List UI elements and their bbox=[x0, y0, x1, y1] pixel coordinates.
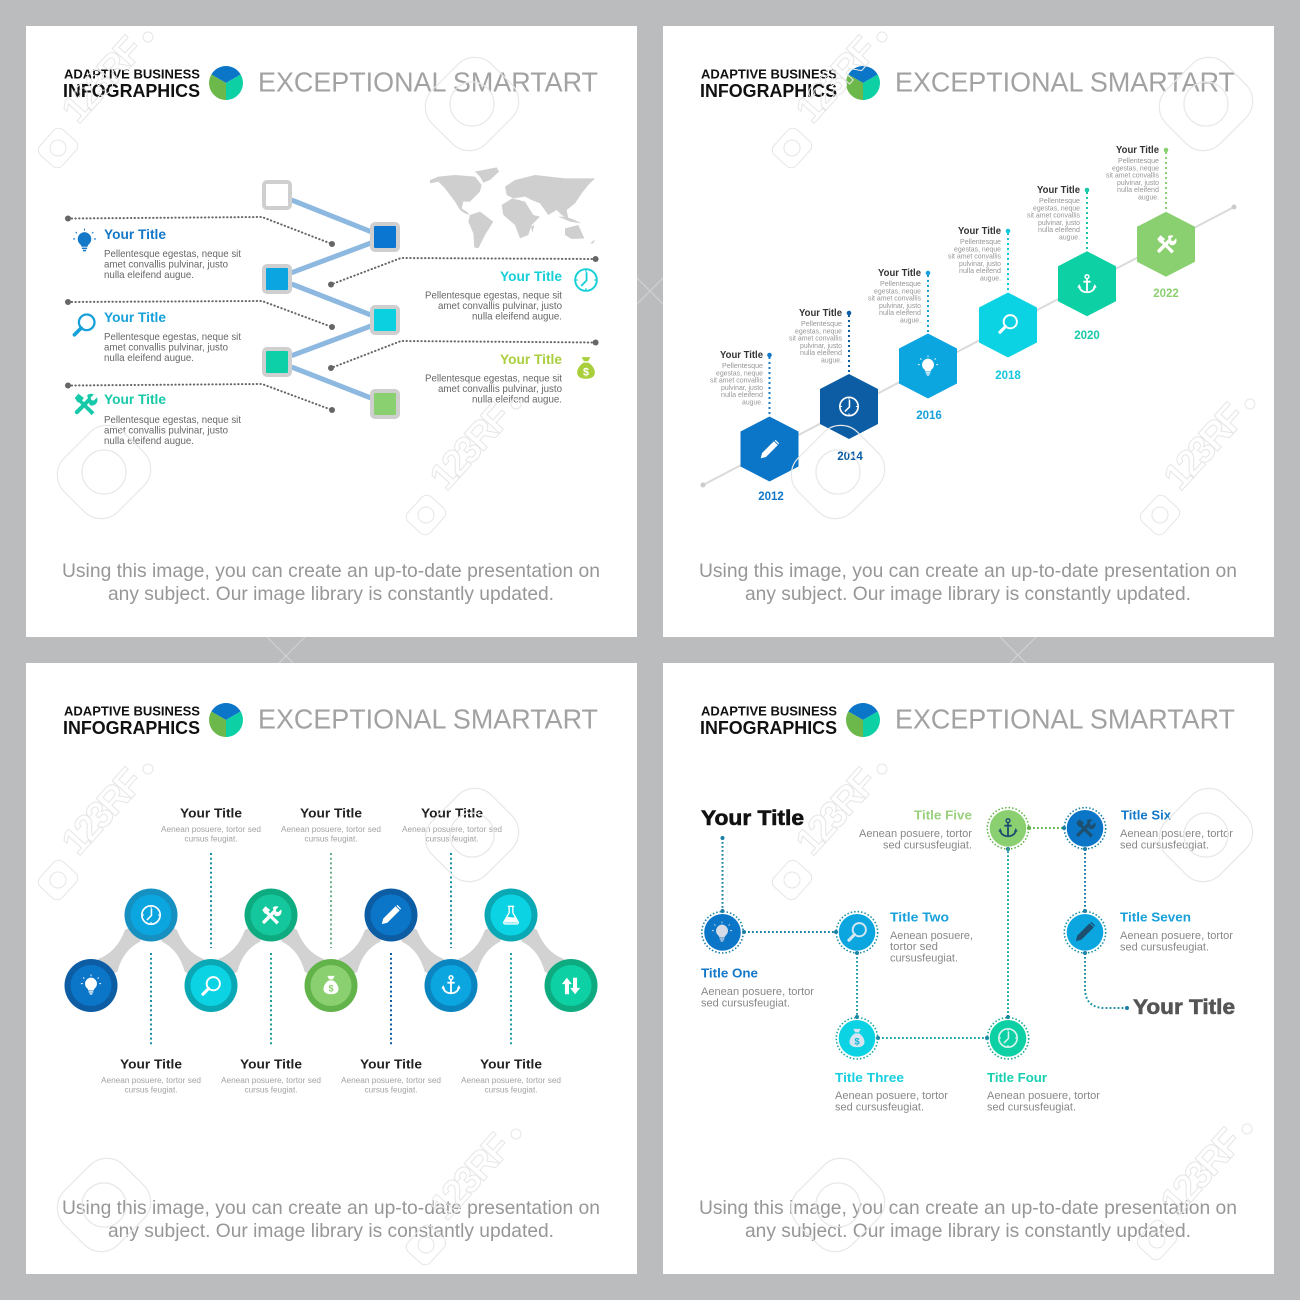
text block: title six: Title Six bbox=[1121, 808, 1172, 822]
step 2012 bbox=[710, 350, 798, 503]
text block: right 1: Pellentesque egestas, neque sit bbox=[425, 290, 562, 302]
text block: title seven: sed cursusfeugiat. bbox=[1120, 942, 1209, 954]
step 2018: pulvinar, justo bbox=[959, 259, 1001, 268]
watermark overlay: 123RF bbox=[422, 1126, 520, 1228]
caption top 2: cursus feugiat. bbox=[304, 834, 358, 844]
caption bottom 1 bbox=[101, 1056, 201, 1094]
caption top 3 bbox=[402, 806, 502, 844]
end title: Your Title bbox=[1133, 996, 1235, 1019]
header: INFOGRAPHICS bbox=[700, 717, 837, 738]
footer text: Using this image, you can create an up-to-date presentation on bbox=[699, 1197, 1237, 1219]
caption bottom 3 bbox=[341, 1056, 441, 1094]
step 2022: Your Title bbox=[1116, 145, 1159, 156]
text block: left 3: amet convallis pulvinar, justo bbox=[104, 426, 228, 436]
step 2014: sit amet convallis bbox=[789, 334, 842, 343]
step 2014 bbox=[789, 308, 878, 463]
text block: right 1 bbox=[425, 268, 562, 322]
text block: title four: Aenean posuere, tortor bbox=[987, 1090, 1100, 1102]
text block: title one: Aenean posuere, tortor bbox=[701, 986, 814, 998]
caption bottom 4: Aenean posuere, tortor sed bbox=[461, 1076, 561, 1085]
text block: title three: Aenean posuere, tortor bbox=[835, 1090, 948, 1102]
caption top 3: Aenean posuere, tortor sed bbox=[402, 825, 502, 834]
icon: bulb bbox=[73, 229, 96, 251]
node 7: pencil bbox=[1064, 912, 1106, 953]
footer text: Using this image, you can create an up-to-date presentation on bbox=[699, 560, 1237, 582]
text block: title two: Title Two bbox=[890, 910, 949, 924]
step 2016: Your Title bbox=[878, 268, 921, 279]
text block: title four bbox=[987, 1070, 1100, 1114]
header bbox=[700, 703, 1235, 738]
footer text bbox=[62, 560, 600, 605]
header: INFOGRAPHICS bbox=[63, 717, 200, 738]
node: arrows bbox=[544, 959, 598, 1012]
step 2020: egestas, neque bbox=[1033, 203, 1080, 212]
watermark overlay: 123RF bbox=[788, 761, 886, 863]
path end dots bbox=[720, 826, 1129, 1040]
step 2022 bbox=[1106, 145, 1195, 300]
caption bottom 3: cursus feugiat. bbox=[364, 1086, 418, 1094]
step 2014: Pellentesque bbox=[801, 319, 842, 328]
text block: right 1: nulla eleifend augue. bbox=[472, 312, 562, 322]
step 2022: nulla eleifend bbox=[1117, 185, 1159, 194]
step 2012: pulvinar, justo bbox=[721, 383, 763, 392]
caption top 2: Your Title bbox=[300, 806, 362, 820]
header: EXCEPTIONAL SMARTART bbox=[895, 66, 1235, 98]
text block: title one: sed cursusfeugiat. bbox=[701, 998, 790, 1010]
panel: process path bbox=[663, 663, 1274, 1274]
text block: title five: Title Five bbox=[914, 808, 972, 822]
step 2016: pulvinar, justo bbox=[879, 301, 921, 310]
dotted path bbox=[722, 828, 1127, 1038]
dotted lines bbox=[151, 853, 511, 1047]
footer text: any subject. Our image library is constantly updated. bbox=[745, 1220, 1191, 1242]
caption bottom 2 bbox=[221, 1056, 321, 1094]
text block: title five bbox=[859, 808, 972, 852]
step 2018: Your Title bbox=[958, 226, 1001, 237]
step 2016: Pellentesque bbox=[880, 279, 921, 288]
header: INFOGRAPHICS bbox=[63, 80, 200, 101]
start title: Your Title bbox=[701, 807, 804, 830]
step 2012: egestas, neque bbox=[716, 368, 763, 377]
step 2014: pulvinar, justo bbox=[800, 341, 842, 350]
header: EXCEPTIONAL SMARTART bbox=[258, 704, 598, 734]
step 2020: pulvinar, justo bbox=[1038, 218, 1080, 227]
caption bottom 4: cursus feugiat. bbox=[484, 1086, 538, 1094]
step 2012: nulla eleifend bbox=[721, 390, 763, 399]
step 2016: sit amet convallis bbox=[868, 294, 921, 303]
step 2016: augue. bbox=[900, 316, 921, 324]
step 2020 bbox=[1027, 185, 1116, 342]
node 3: money bag bbox=[836, 1018, 878, 1059]
node: money bag bbox=[304, 959, 358, 1012]
step 2012: Pellentesque bbox=[722, 361, 763, 370]
icon: money bag bbox=[577, 357, 595, 379]
node: pencil bbox=[364, 888, 418, 942]
text block: title four: sed cursusfeugiat. bbox=[987, 1102, 1076, 1114]
step 2022: augue. bbox=[1138, 192, 1159, 202]
header: ADAPTIVE BUSINESS bbox=[64, 704, 200, 718]
text block: title two bbox=[890, 910, 973, 964]
caption top 1: cursus feugiat. bbox=[184, 834, 238, 844]
text block: title five: Aenean posuere, tortor bbox=[859, 828, 972, 840]
squares bbox=[264, 182, 398, 417]
node: flask bbox=[484, 888, 538, 942]
connector lines bbox=[292, 200, 371, 398]
text block: title two: cursusfeugiat. bbox=[890, 952, 958, 964]
caption top 2: Aenean posuere, tortor sed bbox=[281, 825, 381, 834]
text block: left 1: amet convallis pulvinar, justo bbox=[104, 260, 228, 270]
text block: title two: tortor sed bbox=[890, 941, 938, 953]
text block: title one: Title One bbox=[701, 966, 758, 980]
footer text bbox=[62, 1197, 600, 1242]
step 2016: nulla eleifend bbox=[879, 308, 921, 317]
node: magnifier bbox=[184, 959, 238, 1012]
text block: right 1: amet convallis pulvinar, justo bbox=[438, 301, 562, 312]
step 2022: egestas, neque bbox=[1112, 163, 1159, 172]
text block: title four: Title Four bbox=[987, 1070, 1047, 1085]
node 6: tools bbox=[1064, 808, 1106, 849]
step 2014: nulla eleifend bbox=[800, 348, 842, 357]
footer text bbox=[699, 560, 1237, 605]
caption top 1: Aenean posuere, tortor sed bbox=[161, 825, 261, 834]
caption bottom 4: Your Title bbox=[480, 1056, 542, 1072]
step 2016: 2016 bbox=[916, 410, 942, 422]
step 2014: augue. bbox=[821, 356, 842, 364]
step 2014: egestas, neque bbox=[795, 326, 842, 335]
text block: left 2: Pellentesque egestas, neque sit bbox=[104, 332, 241, 343]
node: clock bbox=[124, 888, 178, 942]
text block: title three: Title Three bbox=[835, 1070, 904, 1085]
watermark overlay: 123RF bbox=[54, 761, 152, 863]
step 2018 bbox=[948, 226, 1037, 382]
caption bottom 4 bbox=[461, 1056, 561, 1094]
step 2012: 2012 bbox=[758, 491, 784, 503]
text block: title five: sed cursusfeugiat. bbox=[883, 840, 972, 852]
step 2018: Pellentesque bbox=[960, 237, 1001, 246]
node 5: anchor bbox=[987, 808, 1029, 849]
panel: hexagon timeline bbox=[663, 26, 1274, 637]
step 2012: Your Title bbox=[720, 350, 763, 361]
text block: title two: Aenean posuere, bbox=[890, 930, 973, 942]
footer text: Using this image, you can create an up-to-date presentation on bbox=[62, 560, 600, 582]
step 2012: sit amet convallis bbox=[710, 376, 763, 385]
text block: left 2: nulla eleifend augue. bbox=[104, 353, 194, 364]
caption bottom 2: Aenean posuere, tortor sed bbox=[221, 1076, 321, 1085]
step 2022: sit amet convallis bbox=[1106, 171, 1159, 180]
caption bottom 1: cursus feugiat. bbox=[124, 1086, 178, 1094]
caption top 2 bbox=[281, 806, 381, 844]
node: tools bbox=[244, 888, 298, 942]
dotted leader lines bbox=[68, 217, 596, 410]
node 2: magnifier bbox=[836, 912, 878, 953]
step 2020: Pellentesque bbox=[1039, 196, 1080, 205]
caption top 1: Your Title bbox=[180, 806, 242, 820]
step 2020: sit amet convallis bbox=[1027, 211, 1080, 220]
caption top 3: Your Title bbox=[421, 806, 483, 820]
text block: title six: Aenean posuere, tortor bbox=[1120, 828, 1233, 840]
step 2018: augue. bbox=[980, 274, 1001, 282]
caption top 3: cursus feugiat. bbox=[426, 834, 478, 844]
step 2018: sit amet convallis bbox=[948, 252, 1001, 261]
header: EXCEPTIONAL SMARTART bbox=[258, 66, 598, 98]
text block: title one bbox=[701, 966, 814, 1010]
icon: clock bbox=[575, 269, 597, 291]
watermark overlay: 123RF bbox=[422, 396, 520, 498]
text block: title three: sed cursusfeugiat. bbox=[835, 1102, 924, 1114]
caption bottom 3: Aenean posuere, tortor sed bbox=[341, 1076, 441, 1085]
text block: right 2: nulla eleifend augue. bbox=[472, 394, 562, 406]
text block: left 3: Your Title bbox=[104, 391, 166, 407]
step 2016 bbox=[868, 268, 957, 422]
node: anchor bbox=[424, 959, 478, 1012]
text block: left 2 bbox=[104, 309, 241, 364]
header bbox=[63, 66, 598, 101]
diagonal axis bbox=[700, 204, 1236, 488]
step 2018: nulla eleifend bbox=[959, 266, 1001, 275]
footer text: any subject. Our image library is constantly updated. bbox=[108, 583, 554, 605]
watermark overlay: 123RF bbox=[788, 29, 886, 131]
caption bottom 2: Your Title bbox=[240, 1056, 302, 1072]
leader dots bbox=[65, 216, 599, 413]
text block: right 1: Your Title bbox=[500, 268, 562, 284]
text block: title six bbox=[1120, 808, 1233, 852]
text block: left 3: nulla eleifend augue. bbox=[104, 436, 194, 447]
step 2020: nulla eleifend bbox=[1038, 225, 1080, 234]
watermark overlay: 123RF bbox=[1153, 1121, 1251, 1223]
caption top 1 bbox=[161, 806, 261, 844]
caption bottom 1: Aenean posuere, tortor sed bbox=[101, 1076, 201, 1085]
text block: right 2: Pellentesque egestas, neque sit bbox=[425, 374, 562, 384]
footer text bbox=[699, 1197, 1237, 1242]
step 2014: 2014 bbox=[837, 451, 863, 463]
text block: right 2 bbox=[425, 351, 562, 406]
text block: title seven: Title Seven bbox=[1120, 910, 1191, 924]
header bbox=[700, 66, 1235, 101]
step 2020: 2020 bbox=[1074, 330, 1100, 342]
text block: left 1: Pellentesque egestas, neque sit bbox=[104, 249, 241, 260]
icon: magnifier bbox=[74, 314, 95, 335]
wave connector bbox=[91, 915, 571, 985]
text block: left 3: Pellentesque egestas, neque sit bbox=[104, 415, 241, 426]
step 2018: 2018 bbox=[995, 370, 1021, 382]
panel: network diagram with world map bbox=[26, 26, 637, 637]
text block: right 2: Your Title bbox=[500, 351, 562, 367]
step 2022: pulvinar, justo bbox=[1117, 178, 1159, 187]
text block: left 3 bbox=[104, 391, 241, 447]
world map bbox=[430, 167, 595, 248]
watermark overlay: 123RF bbox=[1156, 396, 1254, 498]
panel: wave of circles bbox=[26, 663, 637, 1274]
text block: left 1 bbox=[104, 226, 241, 281]
caption bottom 2: cursus feugiat. bbox=[244, 1086, 298, 1094]
footer text: Using this image, you can create an up-to-date presentation on bbox=[62, 1197, 600, 1219]
caption bottom 3: Your Title bbox=[360, 1056, 422, 1072]
text block: title seven: Aenean posuere, tortor bbox=[1120, 930, 1233, 942]
node 1: bulb bbox=[702, 912, 743, 953]
text block: title six: sed cursusfeugiat. bbox=[1120, 840, 1209, 852]
footer text: any subject. Our image library is constantly updated. bbox=[745, 583, 1191, 605]
step 2022: Pellentesque bbox=[1118, 156, 1159, 165]
step 2014: Your Title bbox=[799, 308, 842, 319]
header: ADAPTIVE BUSINESS bbox=[64, 66, 200, 82]
header: EXCEPTIONAL SMARTART bbox=[895, 704, 1235, 734]
node: bulb bbox=[64, 959, 118, 1012]
text block: left 2: Your Title bbox=[104, 309, 166, 325]
step 2020: augue. bbox=[1059, 232, 1080, 242]
step 2018: egestas, neque bbox=[954, 244, 1001, 253]
step 2016: egestas, neque bbox=[874, 286, 921, 295]
step 2022: 2022 bbox=[1153, 288, 1179, 300]
step 2012: augue. bbox=[742, 398, 763, 406]
icon: tools bbox=[75, 394, 98, 415]
header: ADAPTIVE BUSINESS bbox=[701, 66, 837, 82]
text block: left 1: Your Title bbox=[104, 226, 166, 242]
footer text: any subject. Our image library is constantly updated. bbox=[108, 1220, 554, 1242]
header: INFOGRAPHICS bbox=[700, 80, 837, 101]
text block: title seven bbox=[1120, 910, 1233, 954]
caption bottom 1: Your Title bbox=[120, 1056, 182, 1072]
text block: left 2: amet convallis pulvinar, justo bbox=[104, 342, 228, 354]
watermark overlay: 123RF bbox=[54, 29, 152, 131]
header bbox=[63, 703, 598, 738]
text block: title three bbox=[835, 1070, 948, 1114]
text block: right 2: amet convallis pulvinar, justo bbox=[438, 384, 562, 395]
text block: left 1: nulla eleifend augue. bbox=[104, 270, 194, 281]
step 2020: Your Title bbox=[1037, 185, 1080, 196]
header: ADAPTIVE BUSINESS bbox=[701, 704, 837, 718]
node 4: clock bbox=[987, 1018, 1029, 1059]
